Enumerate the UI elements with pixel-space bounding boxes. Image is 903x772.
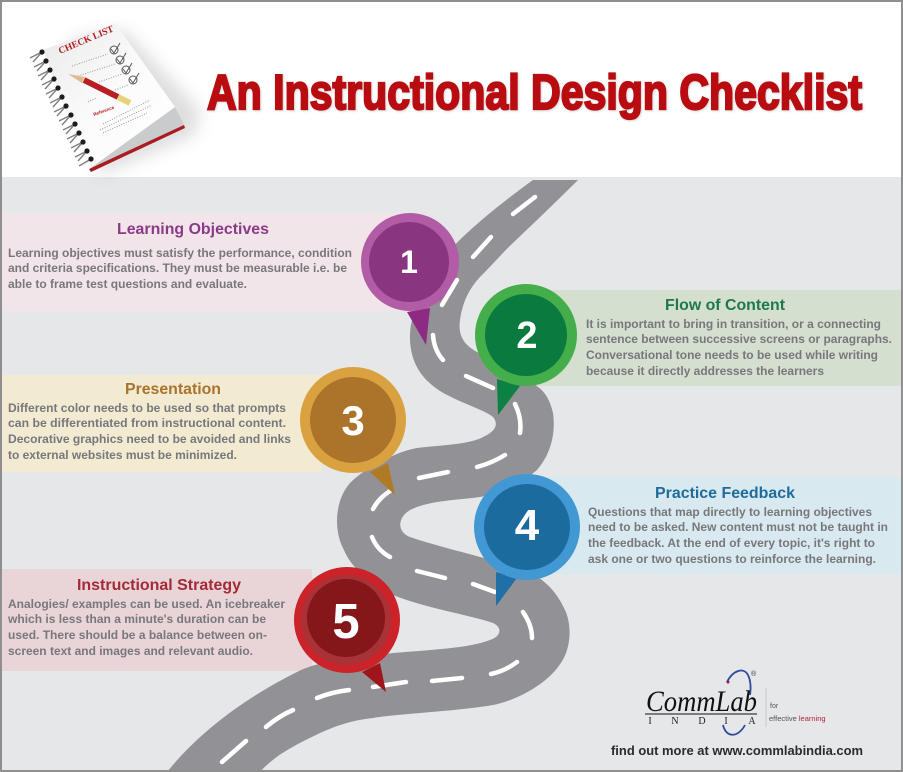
icon: notebook checklist: Reference: [93, 105, 115, 117]
panel: instructional strategy: which is less than a minute's duration can be: [7, 612, 266, 626]
panel: flow of content: because it directly addresses the learners: [586, 364, 824, 378]
panel: instructional strategy: [2, 569, 312, 671]
panel: flow of content: sentence between successive screens or paragraphs.: [586, 332, 892, 346]
panel: practice feedback: [530, 477, 901, 574]
logo: CommLab India: A: [748, 716, 756, 727]
winding road: [167, 180, 578, 772]
pin 4: [474, 474, 580, 606]
pin 2: [475, 284, 577, 415]
logo: CommLab India: D: [698, 716, 706, 727]
panel: practice feedback: Questions that map directly to learning objectives: [588, 505, 872, 519]
heading: flow of content: Flow of Content: [665, 297, 786, 314]
pin 4: 4: [515, 501, 540, 550]
panel: presentation: [2, 375, 322, 472]
logo: CommLab India: for: [770, 703, 779, 710]
pin 3: 3: [341, 397, 365, 444]
icon: notebook checklist: CHECK LIST: [57, 24, 116, 57]
road dash over pin 1: [442, 280, 457, 305]
pin 2: 2: [516, 315, 538, 357]
logo: CommLab India: effective learning: [769, 714, 826, 723]
panel: flow of content: [530, 290, 901, 386]
panel: presentation: Different color needs to be used so that prompts: [8, 401, 286, 415]
logo: CommLab India: ®: [751, 670, 757, 678]
panel: learning objectives: able to frame test questions and evaluate.: [8, 277, 247, 291]
pin 5: [294, 567, 400, 692]
logo: CommLab India: N: [671, 716, 679, 727]
heading: presentation: Presentation: [125, 381, 221, 398]
header band: [2, 2, 901, 177]
heading: practice feedback: Practice Feedback: [655, 485, 795, 502]
pin 1: 1: [400, 244, 418, 280]
website link: find out more at www.commlabindia.com: [611, 743, 863, 758]
logo: CommLab India: CommLab: [646, 685, 757, 718]
panel: practice feedback: the feedback. At the end of every topic, it's right to: [588, 536, 875, 550]
panel: flow of content: It is important to bring in transition, or a connecting: [586, 317, 881, 331]
panel: learning objectives: Learning objectives must satisfy the performance, condition: [8, 246, 352, 260]
panel: learning objectives: [2, 213, 402, 311]
logo: CommLab India: I: [724, 716, 728, 727]
panel: presentation: Decorative graphics need to be avoided and links: [8, 432, 291, 446]
pin 1: [361, 213, 459, 345]
logo: CommLab India: [645, 670, 826, 735]
pin 3: [300, 367, 406, 495]
panel: practice feedback: need to be asked. New content must not be taught in: [588, 520, 888, 534]
pin 5: 5: [332, 595, 360, 649]
heading: instructional strategy: Instructional Strategy: [77, 577, 241, 594]
panel: instructional strategy: Analogies/ examples can be used. An icebreaker: [8, 597, 285, 611]
panel: presentation: to external websites must be minimized.: [8, 448, 237, 462]
panel: flow of content: Conversational tone needs to be used while writing: [586, 348, 878, 362]
panel: instructional strategy: screen text and images and relevant audio.: [8, 644, 253, 658]
icon: notebook checklist: [30, 23, 200, 175]
logo: CommLab India: I: [648, 716, 652, 727]
panel: learning objectives: and criteria specifications. They must be measurable i.e. be: [8, 261, 347, 275]
panel: practice feedback: ask one or two questions to reinforce the learning.: [588, 552, 876, 566]
heading: learning objectives: Learning Objectives: [117, 221, 269, 238]
panel: presentation: can be differentiated from instructional content.: [8, 416, 286, 430]
panel: instructional strategy: used. There should be a balance between on-: [8, 628, 267, 642]
